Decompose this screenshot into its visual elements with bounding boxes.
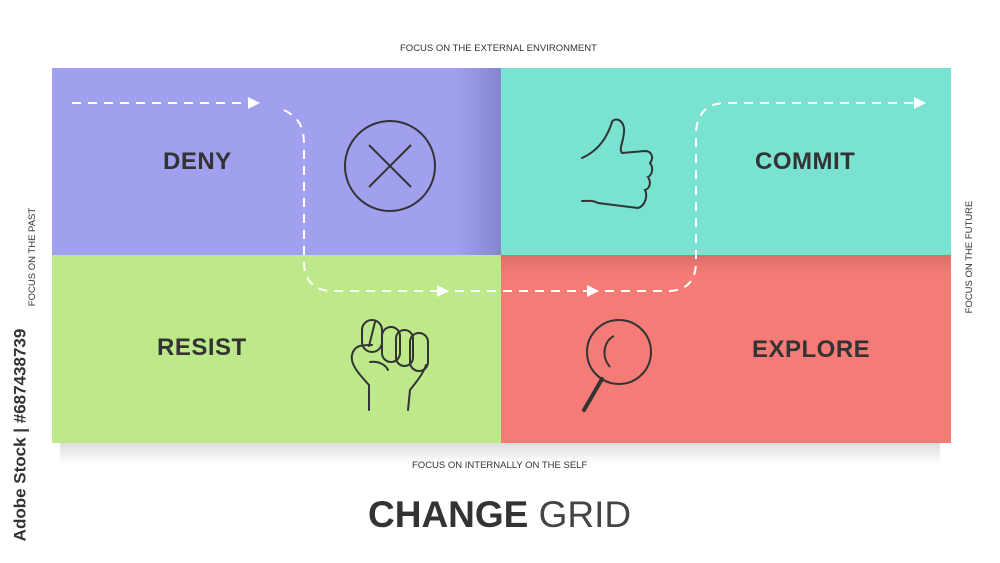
axis label: left: FOCUS ON THE PAST [27,208,38,306]
panel: explore [501,255,951,443]
icon: magnifier [584,320,651,410]
bottom shadow [60,440,940,464]
icon: thumbs up [582,120,652,208]
axis label: top: FOCUS ON THE EXTERNAL ENVIRONMENT [400,43,597,54]
panel: resist [52,255,501,443]
label: explore: EXPLORE [752,336,870,363]
title: CHANGE GRID [368,494,631,535]
label: resist: RESIST [157,334,247,361]
watermark text: Adobe Stock | #687438739 [10,329,30,541]
axis label: bottom: FOCUS ON INTERNALLY ON THE SELF [412,460,587,471]
panel: deny [52,68,501,255]
arrow: dashed flow [72,103,918,291]
icon: fist [352,320,428,410]
label: commit: COMMIT [755,148,855,175]
icon: x circle [345,121,435,211]
axis label: right: FOCUS ON THE FUTURE [964,201,975,313]
panel: commit [501,68,951,255]
label: deny: DENY [163,148,232,175]
